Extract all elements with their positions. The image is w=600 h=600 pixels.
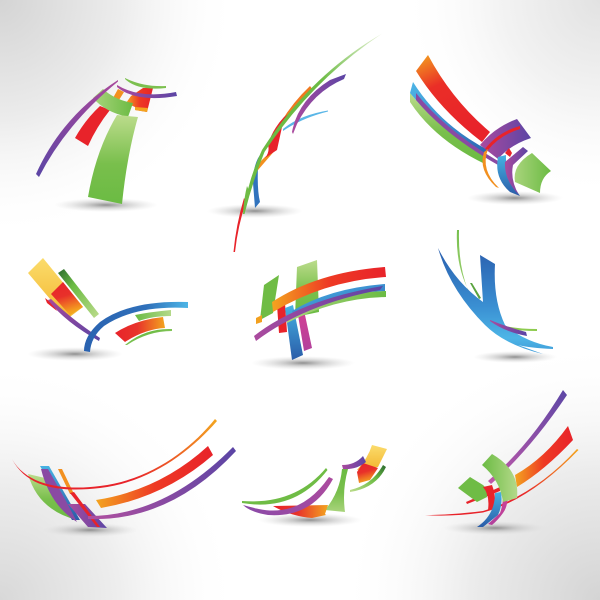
icon 1: green road ribbons — [36, 78, 177, 212]
icon 9: diagonal rising ribbons — [425, 390, 578, 535]
purple arc — [243, 477, 333, 515]
light green tall block — [295, 260, 319, 317]
big green ribbon — [325, 469, 348, 512]
red vertical — [277, 303, 287, 333]
blue band — [410, 82, 488, 155]
purple block — [68, 504, 107, 528]
orange lower stroke — [252, 148, 277, 176]
dark green strip — [58, 269, 99, 318]
red-orange ribbon — [416, 55, 490, 142]
magenta vertical — [298, 315, 312, 351]
green arc — [242, 468, 328, 505]
light green strip — [135, 310, 171, 321]
red tip — [45, 298, 57, 311]
purple tip band — [342, 456, 366, 469]
blue vertical — [285, 305, 303, 360]
green thin arc — [457, 230, 473, 298]
green wedge — [243, 186, 250, 213]
blue ribbon — [253, 155, 260, 208]
red-orange wedge — [273, 505, 328, 518]
orange curve — [482, 149, 499, 188]
green long arc — [243, 33, 383, 214]
red small strip — [466, 487, 500, 504]
purple diagonal — [488, 390, 567, 484]
big green ribbon — [88, 115, 138, 204]
green top arc — [125, 78, 166, 89]
orange tab — [113, 89, 124, 100]
red-orange diagonal — [515, 426, 573, 487]
blue crescent — [497, 155, 520, 196]
icon 4: yellow blocks and blue arc — [27, 258, 188, 361]
blue strip — [40, 466, 80, 520]
purple band — [254, 286, 383, 341]
orange stub — [256, 315, 262, 324]
icon 6: blue V swoosh — [438, 230, 557, 363]
green large block — [482, 454, 517, 502]
green band — [410, 93, 485, 164]
red-orange block — [51, 282, 83, 315]
light green band — [93, 89, 133, 117]
purple arc — [292, 74, 346, 134]
blue main swoosh — [438, 248, 553, 354]
purple arc — [88, 447, 236, 519]
red strip — [70, 492, 100, 527]
orange-red band — [96, 446, 213, 508]
green small block — [458, 477, 487, 502]
red stroke — [265, 113, 290, 158]
orange-red tab — [126, 88, 153, 112]
purple crescent — [505, 147, 528, 195]
purple stripe — [416, 93, 498, 165]
yellow block — [357, 445, 387, 470]
red bar — [75, 106, 110, 146]
red to orange thin curve — [12, 419, 217, 490]
green head — [515, 153, 551, 193]
icon 3: broom of ribbons — [410, 55, 563, 205]
icon 8: flat wave with yellow tip — [242, 445, 387, 527]
green left block — [260, 275, 279, 320]
orange-red band — [272, 267, 386, 312]
purple sliver — [490, 320, 527, 336]
red thin tail — [234, 198, 246, 252]
green line — [505, 326, 537, 331]
red crescent — [483, 485, 495, 510]
red stub — [505, 148, 512, 157]
thin green line — [125, 329, 172, 345]
purple long arc — [36, 80, 118, 177]
blue arc — [84, 302, 188, 352]
purple strip — [41, 469, 77, 522]
icon 2: sweeping thin arcs — [207, 33, 383, 252]
purple strip — [48, 299, 100, 341]
blue band — [292, 284, 385, 314]
red-orange wedge — [115, 317, 165, 342]
icon 5: woven crossing ribbons — [251, 260, 386, 370]
orange lower lip — [135, 107, 148, 112]
green fan — [28, 474, 77, 520]
orange strip — [58, 469, 74, 494]
red block — [357, 463, 378, 483]
green right stroke — [350, 465, 386, 492]
purple short arc — [117, 85, 177, 98]
blue crescent — [477, 492, 502, 527]
icon 7: long low curves — [12, 419, 236, 537]
green band — [287, 291, 386, 323]
big purple block — [480, 119, 531, 159]
light blue line — [283, 110, 328, 131]
yellow block — [28, 258, 83, 319]
magenta crescent — [488, 495, 508, 525]
red curve — [485, 126, 520, 150]
thin red-orange arc — [425, 449, 578, 516]
dark green short line — [470, 283, 481, 299]
orange upper stroke — [281, 86, 313, 122]
